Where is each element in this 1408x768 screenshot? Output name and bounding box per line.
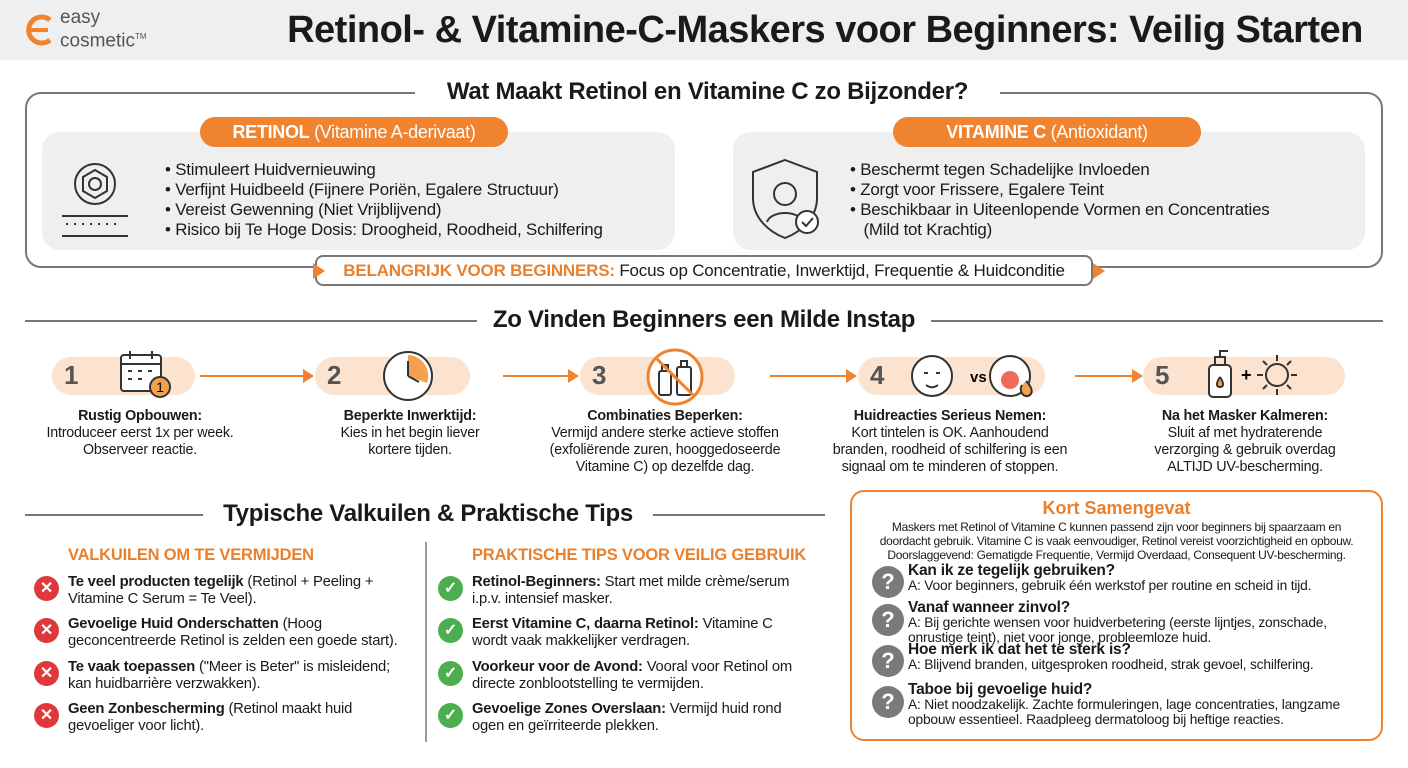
- panel: tips: Voorkeur voor de Avond: Vooral voor Retinol om: [472, 659, 792, 675]
- panel: summary: opbouw essentieel. Raadpleeg dermatoloog bij heftige reacties.: [908, 712, 1284, 727]
- panel: valkuilen: [34, 546, 398, 734]
- step 4: 4: [870, 360, 884, 390]
- step 4 text: branden, roodheid of schilfering is een: [833, 442, 1067, 458]
- faq 2: [872, 604, 904, 636]
- panel: valkuilen: ✕: [40, 580, 53, 597]
- valkuilen heading: VALKUILEN OM TE VERMIJDEN: [68, 546, 314, 564]
- step 4 text: Huidreacties Serieus Nemen:: [854, 408, 1046, 424]
- faq 1: ?: [881, 569, 895, 594]
- panel: valkuilen: geconcentreerde Retinol is zelden een goede start).: [68, 633, 398, 649]
- step 1 text: [46, 408, 234, 458]
- panel: tips: ✓: [444, 665, 457, 682]
- panel: tips: directe zonblootstelling te vermijden.: [472, 676, 704, 692]
- retinol bullets: Vereist Gewenning (Niet Vrijblijvend): [175, 200, 441, 219]
- step 4 text: signaal om te minderen of stoppen.: [842, 459, 1058, 475]
- panel: summary: onrustige teint), niet voor jonge, probleemloze huid.: [908, 630, 1211, 645]
- summary text: [880, 520, 1353, 562]
- panel: tips: Gevoelige Zones Overslaan: Vermijd huid rond: [472, 701, 782, 717]
- panel: retinol: [42, 132, 675, 250]
- step 3 text: (exfoliërende zuren, hooggedoseerde: [550, 442, 780, 458]
- panel: summary: A: Bij gerichte wensen voor huidverbetering (eerste lijntjes, zonschade,: [908, 615, 1327, 630]
- panel: tips: [438, 546, 806, 734]
- retinol pill: RETINOL (Vitamine A-derivaat): [232, 122, 476, 142]
- column divider: [425, 542, 427, 742]
- step 2: 2: [327, 360, 341, 390]
- faq 3: ?: [881, 648, 895, 673]
- panel: summary: A: Blijvend branden, uitgesproken roodheid, strak gevoel, schilfering.: [908, 657, 1314, 672]
- step 2: [315, 357, 470, 395]
- retinol bullets: Stimuleert Huidvernieuwing: [175, 160, 376, 179]
- panel: valkuilen: Vitamine C Serum = Te Veel).: [68, 591, 256, 607]
- faq 2: ?: [881, 607, 895, 632]
- panel: summary: Hoe merk ik dat het te sterk is?: [908, 641, 1131, 658]
- step 1 text: Observeer reactie.: [83, 442, 197, 458]
- section 3 heading: Typische Valkuilen & Praktische Tips: [223, 500, 633, 527]
- step 2 text: kortere tijden.: [368, 442, 452, 458]
- vitamin c bullets: Zorgt voor Frissere, Egalere Teint: [860, 180, 1104, 199]
- faq 3: [872, 645, 904, 677]
- vitamin c pill: VITAMINE C (Antioxidant): [946, 122, 1148, 142]
- logo: easy: [60, 7, 100, 28]
- panel: valkuilen: Te vaak toepassen ("Meer is Beter" is misleidend;: [68, 659, 390, 675]
- icon: retinol skin: [62, 163, 128, 237]
- header bar: [0, 0, 1408, 60]
- panel: valkuilen: gevoeliger voor licht).: [68, 718, 204, 734]
- logo: [26, 7, 147, 51]
- panel: tips: ogen en geïrriteerde plekken.: [472, 718, 659, 734]
- step 5 text: [1154, 408, 1336, 475]
- arrow 2-3: [503, 375, 577, 377]
- vitamin c bullets: Beschikbaar in Uiteenlopende Vormen en Concentraties: [860, 200, 1270, 219]
- summary text: Doorslaggevend: Gematigde Frequentie, Vermijd Overdaad, Consequent UV-bescherming.: [887, 548, 1346, 562]
- title: Retinol- & Vitamine-C-Maskers voor Beginners: Veilig Starten: [287, 9, 1363, 51]
- panel: tips: wordt vaak makkelijker verdragen.: [472, 633, 690, 649]
- icon: calendar: 1: [156, 379, 164, 395]
- panel: tips: ✓: [444, 707, 457, 724]
- step 3: [580, 357, 735, 395]
- panel: summary: Kan ik ze tegelijk gebruiken?: [908, 562, 1115, 579]
- panel: tips: Retinol-Beginners: Start met milde crème/serum: [472, 574, 789, 590]
- faq 1: [872, 566, 904, 598]
- vitamin c pill: [893, 117, 1201, 147]
- arrow 3-4: [770, 375, 855, 377]
- panel: summary: Taboe bij gevoelige huid?: [908, 681, 1092, 698]
- step 5: [1143, 357, 1345, 395]
- step 2 text: [340, 408, 480, 458]
- step 3: 3: [592, 360, 606, 390]
- panel: valkuilen: ✕: [40, 707, 53, 724]
- callout: belangrijk: [315, 255, 1093, 286]
- step 1: 1: [64, 360, 78, 390]
- arrow 1-2: [200, 375, 312, 377]
- step 5 text: verzorging & gebruik overdag: [1154, 442, 1336, 458]
- vitamin c bullets: [850, 160, 1270, 239]
- step 1 text: Rustig Opbouwen:: [78, 408, 202, 424]
- callout: belangrijk: BELANGRIJK VOOR BEGINNERS: Focus op Concentratie, Inwerktijd, Frequentie & Huidconditie: [343, 261, 1065, 280]
- step 4 text: Kort tintelen is OK. Aanhoudend: [851, 425, 1049, 441]
- step 3 text: Vitamine C) op dezelfde dag.: [576, 459, 754, 475]
- panel: valkuilen: kan huidbarrière verzwakken).: [68, 676, 260, 692]
- panel: tips: ✓: [444, 580, 457, 597]
- icon: bottle plus sun: +: [1241, 365, 1252, 385]
- summary text: Maskers met Retinol of Vitamine C kunnen passend zijn voor beginners bij spaarzaam en: [892, 520, 1341, 534]
- icon: no combination bottles: [646, 348, 704, 406]
- panel: summary: Vanaf wanneer zinvol?: [908, 599, 1070, 616]
- icon: clock: [383, 351, 433, 401]
- icon: faces vs: vs: [970, 369, 987, 386]
- icon: shield face: [752, 158, 819, 240]
- arrow 4-5: [1075, 375, 1141, 377]
- step 1 text: Introduceer eerst 1x per week.: [46, 425, 234, 441]
- icon: faces vs: [911, 355, 1033, 398]
- tips heading: PRAKTISCHE TIPS VOOR VEILIG GEBRUIK: [472, 546, 806, 564]
- step 2 text: Beperkte Inwerktijd:: [344, 408, 476, 424]
- summary heading: Kort Samengevat: [1042, 498, 1191, 518]
- section 1 heading: Wat Maakt Retinol en Vitamine C zo Bijzonder?: [447, 78, 968, 105]
- icon: bottle plus sun: [1208, 350, 1297, 398]
- faq 4: [872, 686, 904, 718]
- step 5: 5: [1155, 360, 1169, 390]
- step 5 text: Sluit af met hydraterende: [1168, 425, 1322, 441]
- panel: valkuilen: Te veel producten tegelijk (Retinol + Peeling +: [68, 574, 373, 590]
- icon: calendar: [120, 351, 171, 398]
- vitamin c bullets: (Mild tot Krachtig): [863, 220, 992, 239]
- panel: summary: A: Voor beginners, gebruik één werkstof per routine en scheid in tijd.: [908, 578, 1311, 593]
- panel: tips: i.p.v. intensief masker.: [472, 591, 612, 607]
- retinol pill: [200, 117, 508, 147]
- step 5 text: Na het Masker Kalmeren:: [1162, 408, 1328, 424]
- section 2 heading: Zo Vinden Beginners een Milde Instap: [493, 306, 915, 333]
- step 3 text: Combinaties Beperken:: [587, 408, 743, 424]
- panel: valkuilen: Geen Zonbescherming (Retinol maakt huid: [68, 701, 352, 717]
- vitamin c bullets: Beschermt tegen Schadelijke Invloeden: [860, 160, 1150, 179]
- logo: cosmeticTM: [60, 30, 147, 51]
- step 3 text: [550, 408, 780, 475]
- panel: valkuilen: Gevoelige Huid Onderschatten (Hoog: [68, 616, 322, 632]
- retinol bullets: Risico bij Te Hoge Dosis: Droogheid, Roodheid, Schilfering: [175, 220, 603, 239]
- panel: summary: A: Niet noodzakelijk. Zachte formuleringen, lage concentraties, langzame: [908, 697, 1340, 712]
- panel: valkuilen: ✕: [40, 665, 53, 682]
- retinol bullets: Verfijnt Huidbeeld (Fijnere Poriën, Egalere Structuur): [175, 180, 559, 199]
- section 1 frame: [25, 92, 1383, 268]
- step 2 text: Kies in het begin liever: [340, 425, 480, 441]
- panel: tips: ✓: [444, 622, 457, 639]
- step 4 text: [833, 408, 1067, 475]
- step 5 text: ALTIJD UV-bescherming.: [1167, 459, 1323, 475]
- step 4: [858, 357, 1045, 395]
- step 1: [52, 357, 195, 395]
- step 3 text: Vermijd andere sterke actieve stoffen: [551, 425, 779, 441]
- faq 4: ?: [881, 689, 895, 714]
- panel: tips: Eerst Vitamine C, daarna Retinol: Vitamine C: [472, 616, 773, 632]
- summary text: doordacht gebruik. Vitamine C is vaak eenvoudiger, Retinol vereist voorzichtigheid en opbouw.: [880, 534, 1353, 548]
- panel: summary: [850, 490, 1383, 741]
- panel: vitamin c: [733, 132, 1365, 250]
- retinol bullets: [166, 160, 603, 239]
- panel: valkuilen: ✕: [40, 622, 53, 639]
